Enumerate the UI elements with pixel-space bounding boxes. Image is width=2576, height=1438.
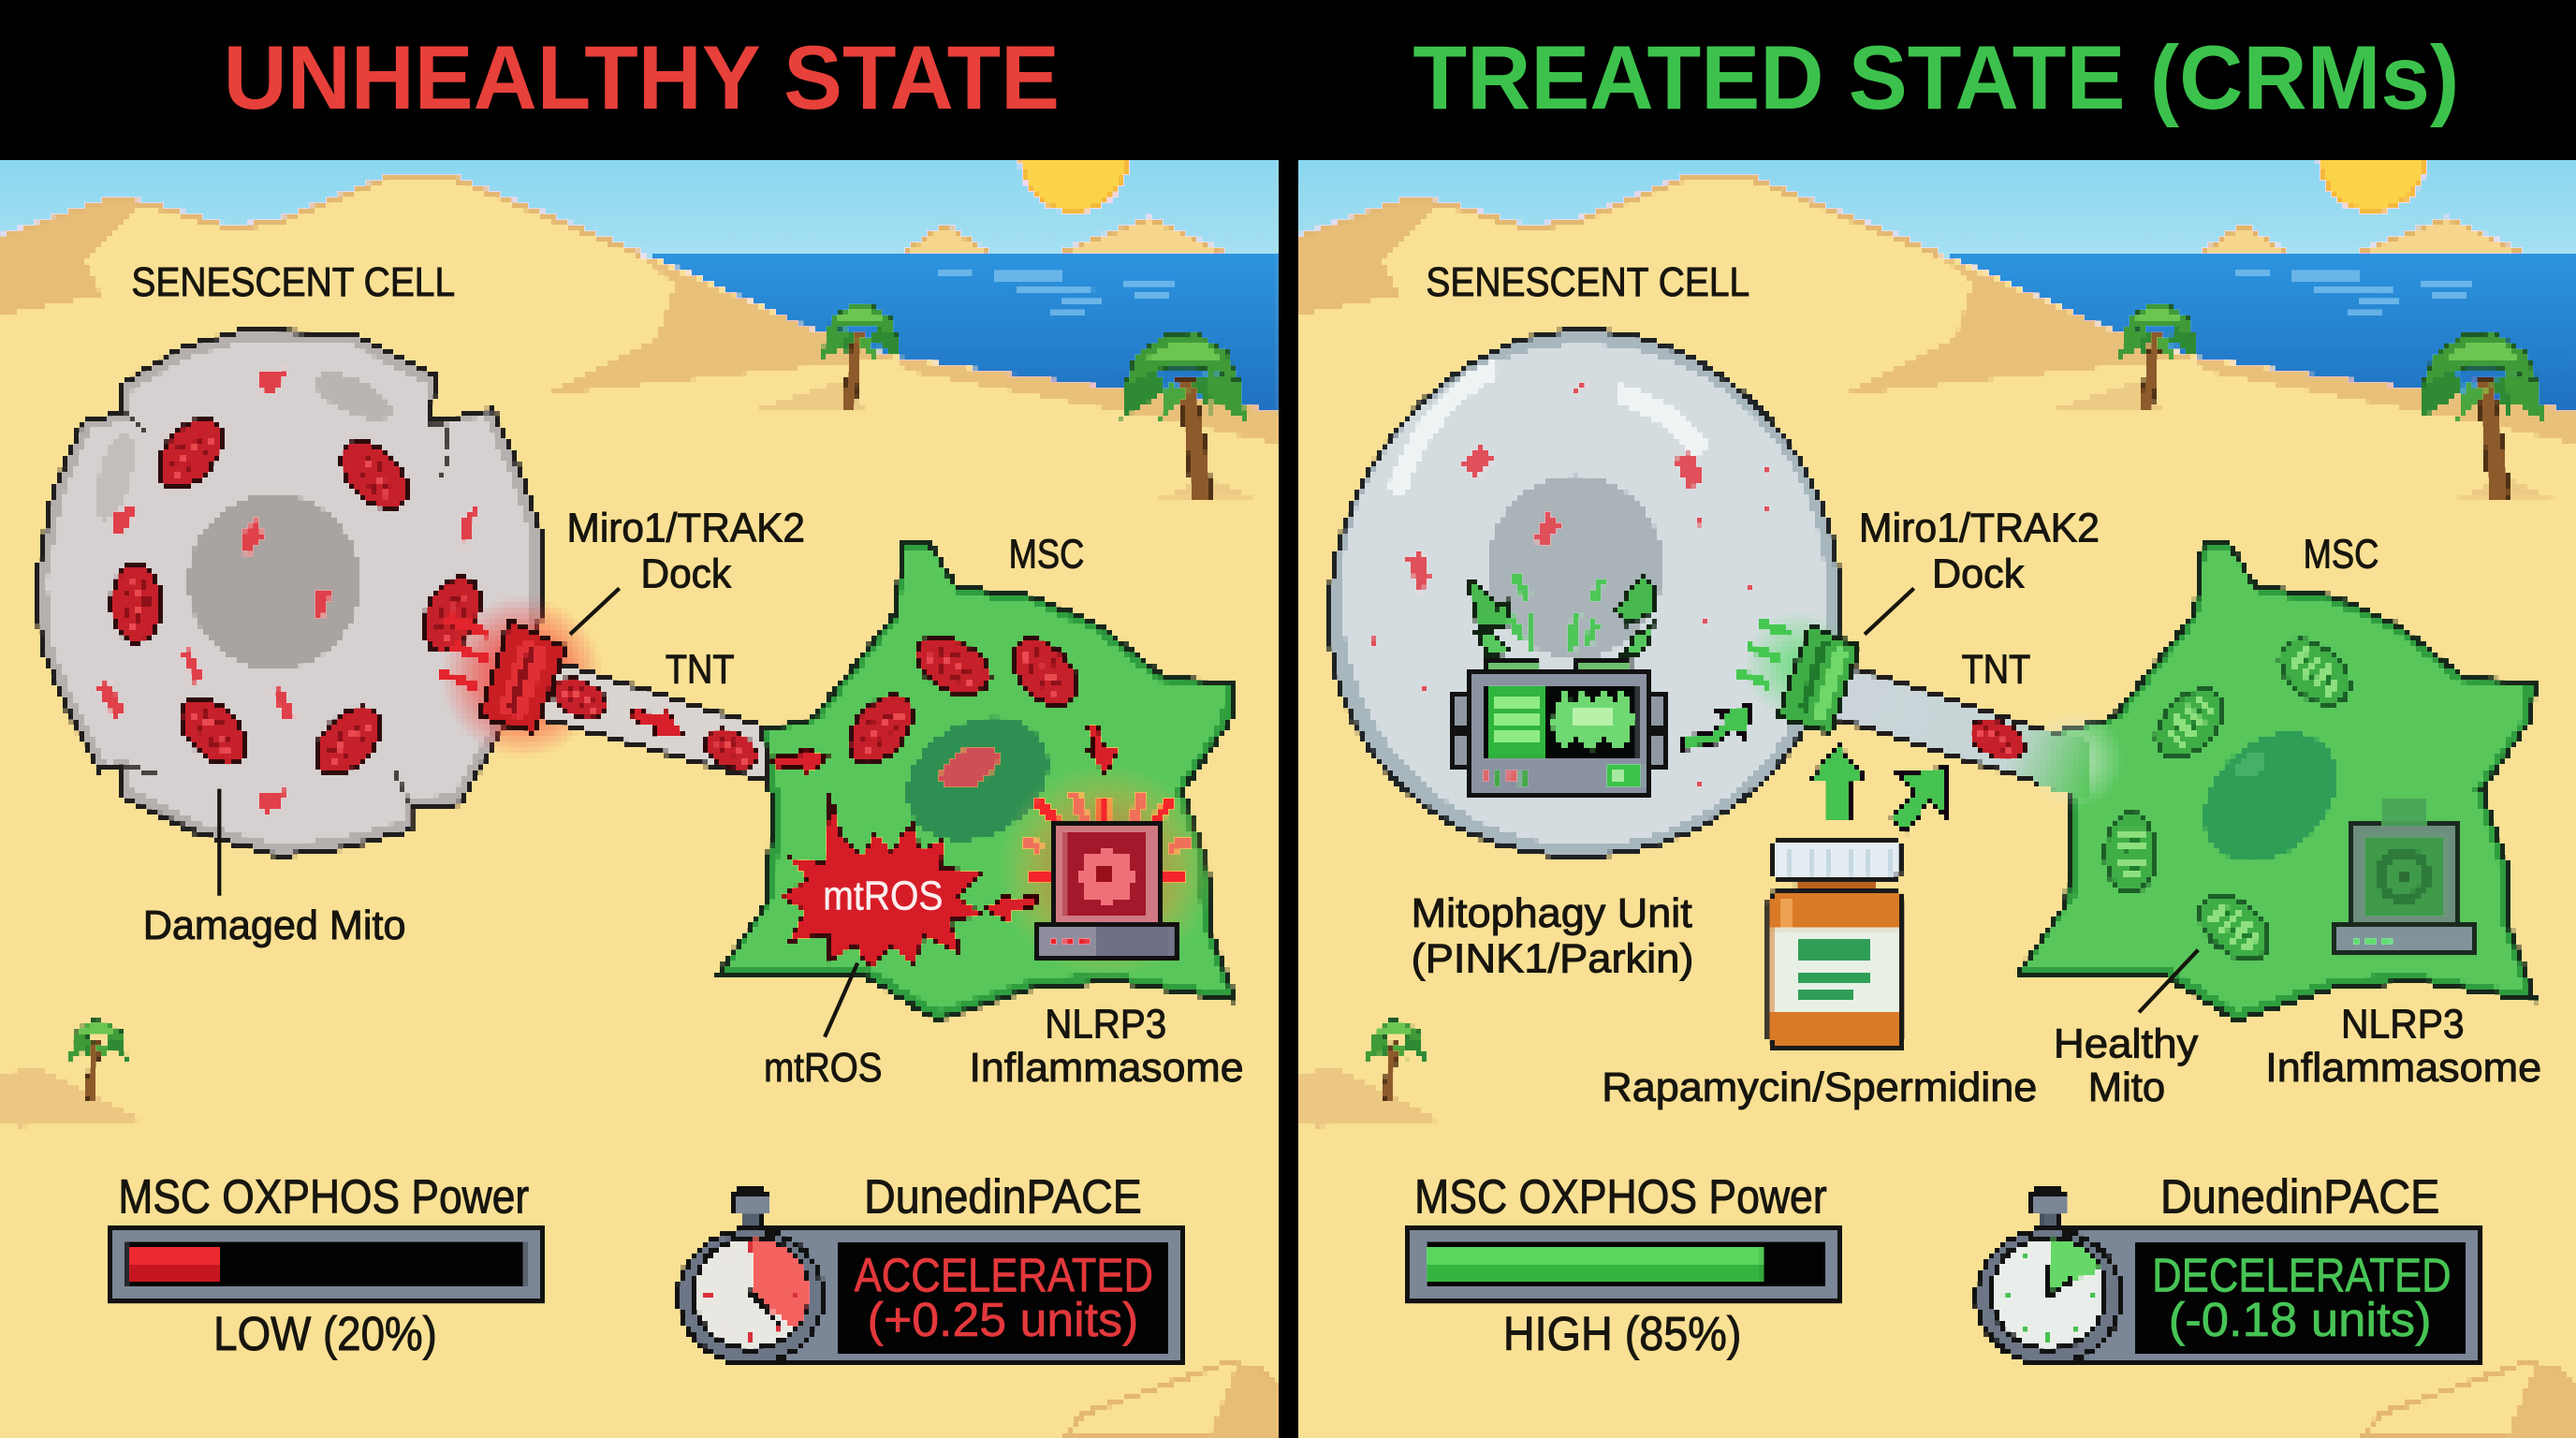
mitophagy unit machine [1453,661,1667,797]
mitophagy fragments [1467,575,1656,657]
readout: decelerated [2152,1249,2452,1346]
NLRP3 inflammasome (active) [997,763,1214,979]
title: treated state: TREATED STATE (CRMs) [1412,28,2459,128]
label: damaged mito with leader: Damaged Mito [143,902,406,948]
readout: accelerated: (+0.25 units) [868,1293,1138,1346]
background: beach, sea and palms [0,105,1298,1438]
nucleus [187,493,361,670]
label: NLRP3 inflammasome: NLRP3 [1045,1002,1166,1048]
label: OXPHOS value: HIGH (85%) [1503,1307,1741,1360]
label: NLRP3 inflammasome [970,1002,1244,1091]
labels: unhealthy state [118,259,1244,1360]
readout: decelerated: (-0.18 units) [2169,1293,2432,1346]
label: OXPHOS value: LOW (20%) [213,1307,437,1360]
label: senescent cell: SENESCENT CELL [131,259,455,305]
label: healthy mito with leader: Mito [2088,1064,2165,1110]
readout: accelerated: ACCELERATED [855,1249,1153,1302]
DunedinPACE stopwatch readout (decelerated) [1976,1186,2482,1364]
label: MSC: MSC [2304,531,2378,577]
label: MSC: MSC [1009,531,1084,577]
NLRP3 inflammasome (dimmed) [2336,800,2472,955]
illustration: treated beach scene [1298,105,2576,1438]
label: dock with leader: Dock [640,551,731,597]
label: OXPHOS power: MSC OXPHOS Power [118,1169,529,1223]
label: mtROS with leader: mtROS [764,1045,882,1091]
tunneling nanotube [535,661,768,783]
label: healthy mito with leader [2054,950,2198,1110]
label: dock with leader [567,505,805,635]
dock glow [1743,609,1855,722]
Miro1/TRAK2 dock (green) [1778,624,1860,733]
label: TNT: TNT [1962,646,2030,692]
label: NLRP3 inflammasome: Inflammasome [2265,1045,2541,1091]
arrow: mitophagy to dock [1682,705,1753,749]
label: mtROS with leader [764,963,882,1091]
label: mitophagy unit: Mitophagy Unit [1412,890,1692,936]
OXPHOS power bar (high) [1408,1229,1838,1303]
arrow: drug to nanotube [1891,768,1949,833]
label: rapamycin/spermidine: Rapamycin/Spermidine [1602,1064,2037,1110]
readout: decelerated: DECELERATED [2152,1249,2452,1302]
senescent cell (damaged) [37,330,542,857]
nucleus [1486,475,1664,659]
label: mitophagy unit: (PINK1/Parkin) [1412,935,1694,981]
MSC nucleus [884,691,1072,867]
mtROS starburst [781,790,983,970]
label: dock with leader: Dock [1932,551,2024,597]
label: DunedinPACE: DunedinPACE [2160,1169,2439,1223]
arrow: drug to dock [1808,744,1866,820]
DunedinPACE stopwatch readout (accelerated) [679,1186,1184,1364]
protein flecks [95,368,476,815]
label: dock with leader [1859,505,2100,635]
readout: accelerated [855,1249,1153,1346]
red signal dashes [440,618,490,687]
dock glow [440,594,605,759]
Miro1/TRAK2 dock (red) [479,622,567,733]
background: beach, sea and palms [1298,105,2576,1438]
senescent cell (restored) [1329,330,1840,857]
panel: treated state [1298,105,2576,1438]
label: dock with leader: Miro1/TRAK2 [567,505,805,550]
OXPHOS power bar (low) [110,1229,540,1303]
illustration: unhealthy beach scene [0,105,1298,1438]
title: unhealthy state: UNHEALTHY STATE [224,28,1060,128]
residual flecks [1368,383,1771,789]
label: dock with leader: Miro1/TRAK2 [1859,505,2100,550]
label: mitophagy unit [1412,890,1694,981]
MSC cell (stressed) [718,541,1236,1020]
label: senescent cell: SENESCENT CELL [1426,259,1749,305]
damaged mitochondria [111,407,490,787]
panel: unhealthy state [0,105,1298,1438]
label: OXPHOS power: MSC OXPHOS Power [1414,1169,1827,1223]
label: NLRP3 inflammasome: Inflammasome [970,1045,1244,1091]
green signal dashes [1736,622,1791,685]
MSC cell (healthy) [2017,541,2535,1020]
labels: treated state [1412,259,2541,1360]
label: DunedinPACE: DunedinPACE [864,1169,1142,1223]
healthy mitochondria [2105,627,2362,972]
Rapamycin/Spermidine bottle [1769,842,1904,1050]
MSC nucleus [2177,705,2364,889]
label: NLRP3 inflammasome [2265,1002,2541,1091]
label: TNT: TNT [666,646,735,692]
label: mtROS inside burst: mtROS [823,873,943,919]
arrows: damage cascade [772,725,1119,924]
tunneling nanotube [1835,666,2123,809]
label: healthy mito with leader: Healthy [2054,1021,2198,1067]
label: NLRP3 inflammasome: NLRP3 [2341,1002,2465,1048]
